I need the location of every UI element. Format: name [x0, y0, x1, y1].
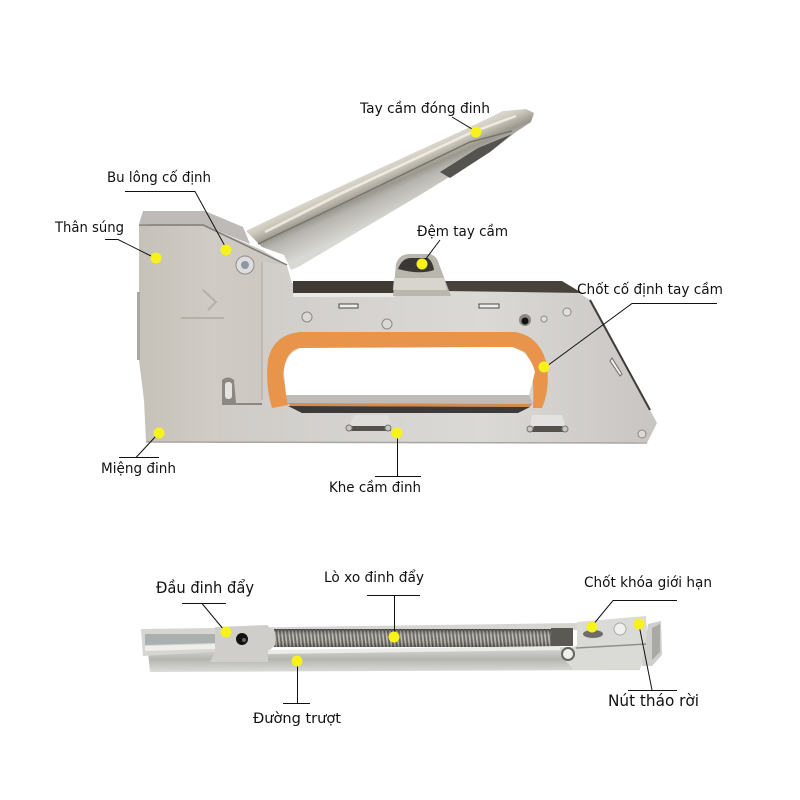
label: pusher head: Đầu đinh đẩy [156, 578, 254, 597]
orange grip [267, 332, 548, 408]
frame body [222, 250, 657, 443]
magazine strip [286, 395, 533, 413]
spring [274, 629, 560, 647]
label: release button: Nút tháo rời [608, 691, 699, 710]
pusher block [210, 625, 275, 662]
plate emblem [181, 290, 224, 318]
label: gun body: Thân súng [54, 220, 124, 236]
handle pad [393, 254, 451, 296]
firing handle [246, 109, 534, 270]
label: handle lock pin: Chốt cố định tay cầm [577, 281, 723, 298]
spring end [551, 628, 573, 646]
staple pusher rail [141, 616, 662, 672]
lower rail [148, 646, 640, 672]
label: staple slot: Khe cầm đinh [329, 480, 421, 496]
dark slot behind frame top [293, 281, 395, 293]
label: staple mouth: Miệng đinh [101, 461, 176, 477]
label: slide rail: Đường trượt [253, 711, 342, 727]
rail highlight [268, 646, 560, 654]
pusher channel [145, 634, 215, 645]
marker dots [150, 126, 644, 666]
label: fixing bolt: Bu lông cố định [107, 169, 211, 186]
label: handle pad: Đệm tay cầm [417, 224, 508, 240]
leader lines [105, 117, 717, 704]
front plate [139, 225, 287, 442]
frame bottom edge [146, 442, 647, 443]
fixing bolt [236, 256, 254, 274]
stapler illustration [137, 109, 657, 443]
frame right edge [590, 300, 650, 410]
label: firing handle: Tay cầm đóng đinh [359, 101, 490, 117]
label: limit latch: Chốt khóa giới hạn [584, 574, 712, 591]
end bracket [560, 616, 662, 670]
plate notch [222, 378, 262, 405]
frame rivets and slots [302, 304, 646, 438]
label: pusher spring: Lò xo đinh đẩy [324, 569, 424, 586]
upper rail [141, 623, 577, 656]
top cover [139, 211, 250, 244]
